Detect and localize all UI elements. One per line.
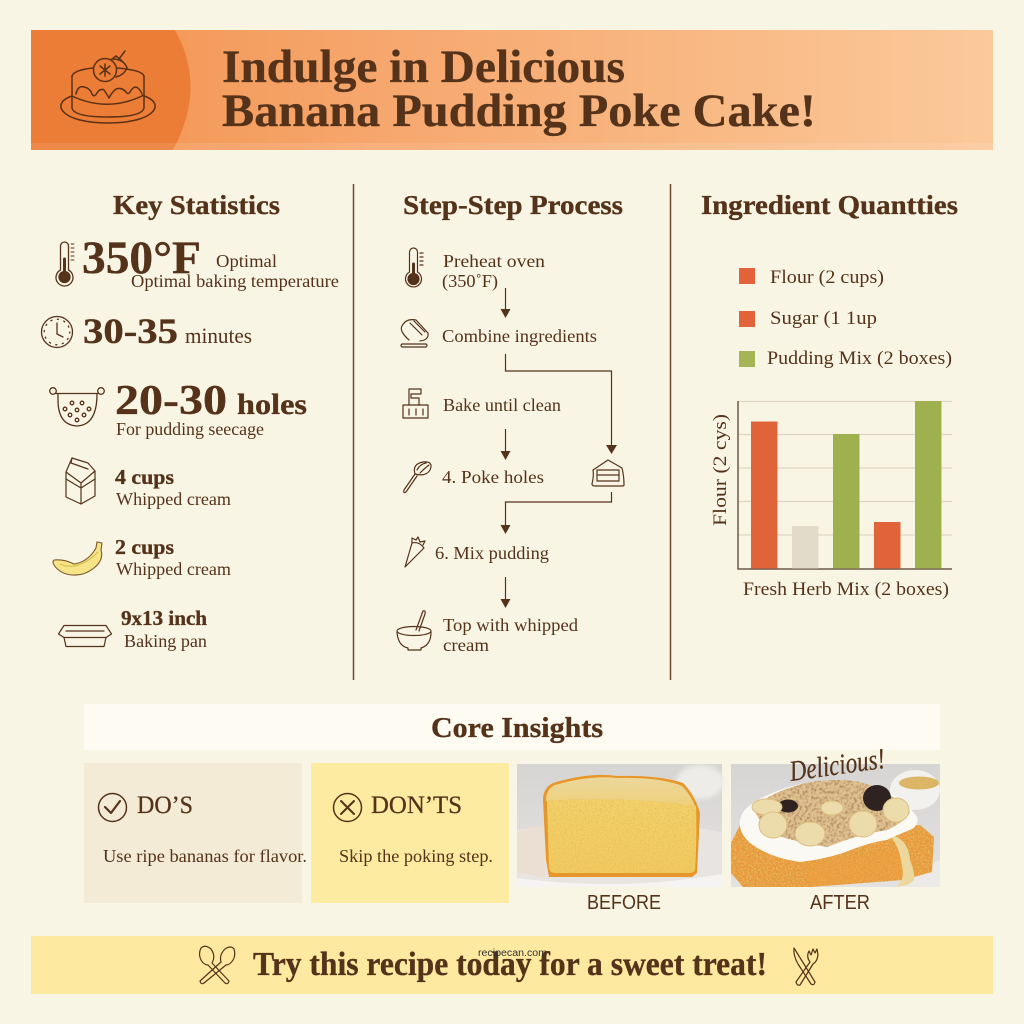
step 1: (350˚F) [442,271,498,292]
panel: dos: Use ripe bananas for flavor. [103,846,307,866]
handwritten label: delicious: Delicious! [787,743,887,788]
step 1 [442,251,545,292]
title [222,41,816,137]
stat: baking pan: Baking pan [124,631,207,651]
bar chart [710,401,952,600]
heading band: core insights [84,704,940,750]
panel: dos: DO’S [137,792,193,819]
icon: baking pan [58,626,112,646]
icon: thermometer [406,248,423,287]
connector arrow [500,492,612,534]
icon: thermometer [56,242,74,286]
title: Indulge in Delicious [222,41,625,93]
topping [753,780,910,847]
heading: process: Step-Step Process [403,190,623,220]
panel: donts: DON’TS [371,792,462,819]
stat: baking pan [121,606,207,651]
panel: dos [84,763,307,903]
header banner [31,30,993,150]
heading band: core insights: Core Insights [431,712,603,744]
stat: minutes: 30-35 [83,311,178,351]
connector arrow [506,354,617,454]
icon: mixer [401,320,428,347]
legend: Pudding Mix (2 boxes) [767,349,952,369]
panel: process [397,190,624,655]
step 1: Preheat oven [443,251,545,271]
stat: 350F: Optimal baking temperature [131,271,339,291]
stat: 350F: 350°F [82,232,201,284]
legend [739,268,952,369]
step 6: Top with whipped [443,615,578,635]
label: before: BEFORE [587,892,661,914]
legend: Sugar (1 1up [770,309,877,329]
step 5: 6. Mix pudding [435,543,549,563]
stat: holes: For pudding seecage [116,419,264,439]
stat: minutes: minutes [185,323,252,348]
icon: knife and fork [794,948,818,985]
icon: cake [61,51,155,123]
panel: key statistics [42,190,339,651]
photo: before [517,764,724,887]
stat: minutes [83,311,252,351]
step 6: cream [443,635,489,655]
stat: cups: 2 cups [115,535,174,559]
step 6 [443,615,578,655]
stat: whipped cream: Whipped cream [116,489,231,509]
photo: after [731,764,940,887]
bar chart: Flour (2 cys) [710,414,731,526]
drip [890,835,914,886]
arrow [500,288,510,318]
step 3: Bake until clean [443,395,561,415]
stat: 350F: Optimal [216,251,277,271]
bar chart: Fresh Herb Mix (2 boxes) [743,580,949,600]
step 4: 4. Poke holes [442,467,544,487]
stat: whipped cream: 4 cups [115,465,174,489]
icon: colander [50,388,104,426]
icon: piping bag [405,537,425,567]
arrow [500,577,510,608]
icon: bowl [397,611,431,650]
stat: cups [115,535,231,579]
footer banner [31,936,993,994]
stat: cups: Whipped cream [116,559,231,579]
cake body [731,825,934,887]
step 2: Combine ingredients [442,326,597,346]
arrow [500,429,510,460]
watermark: recipecan.com [478,948,547,959]
dividers [354,184,670,680]
stat: whipped cream [115,465,231,509]
frosting [740,781,917,862]
icon: cross [334,794,362,822]
stat: baking pan: 9x13 inch [121,606,207,630]
stat: 350F [82,232,339,291]
legend: Flour (2 cups) [770,268,884,288]
panel: ingredient quantities [701,190,958,600]
stat: holes [115,378,307,439]
icon: banana [53,542,102,575]
icon: milk carton [66,458,95,504]
icon: stand mixer [403,389,428,418]
heading: key statistics: Key Statistics [113,190,280,220]
icon: whisk [404,462,431,493]
footer text: Try this recipe today for a sweet treat! [253,946,767,983]
panel: core insights [84,704,940,914]
panel: donts: Skip the poking step. [339,846,493,866]
heading: ingredient quantities: Ingredient Quantties [701,190,958,220]
icon: spoons [200,946,235,984]
icon: cake slice [592,460,624,486]
icon: check [98,794,126,822]
panel: donts [311,763,509,903]
label: after: AFTER [810,892,870,914]
stat: holes: holes [237,388,307,421]
stat: holes: 20-30 [115,378,227,424]
icon: clock [42,316,72,348]
title: Banana Pudding Poke Cake! [222,85,816,137]
